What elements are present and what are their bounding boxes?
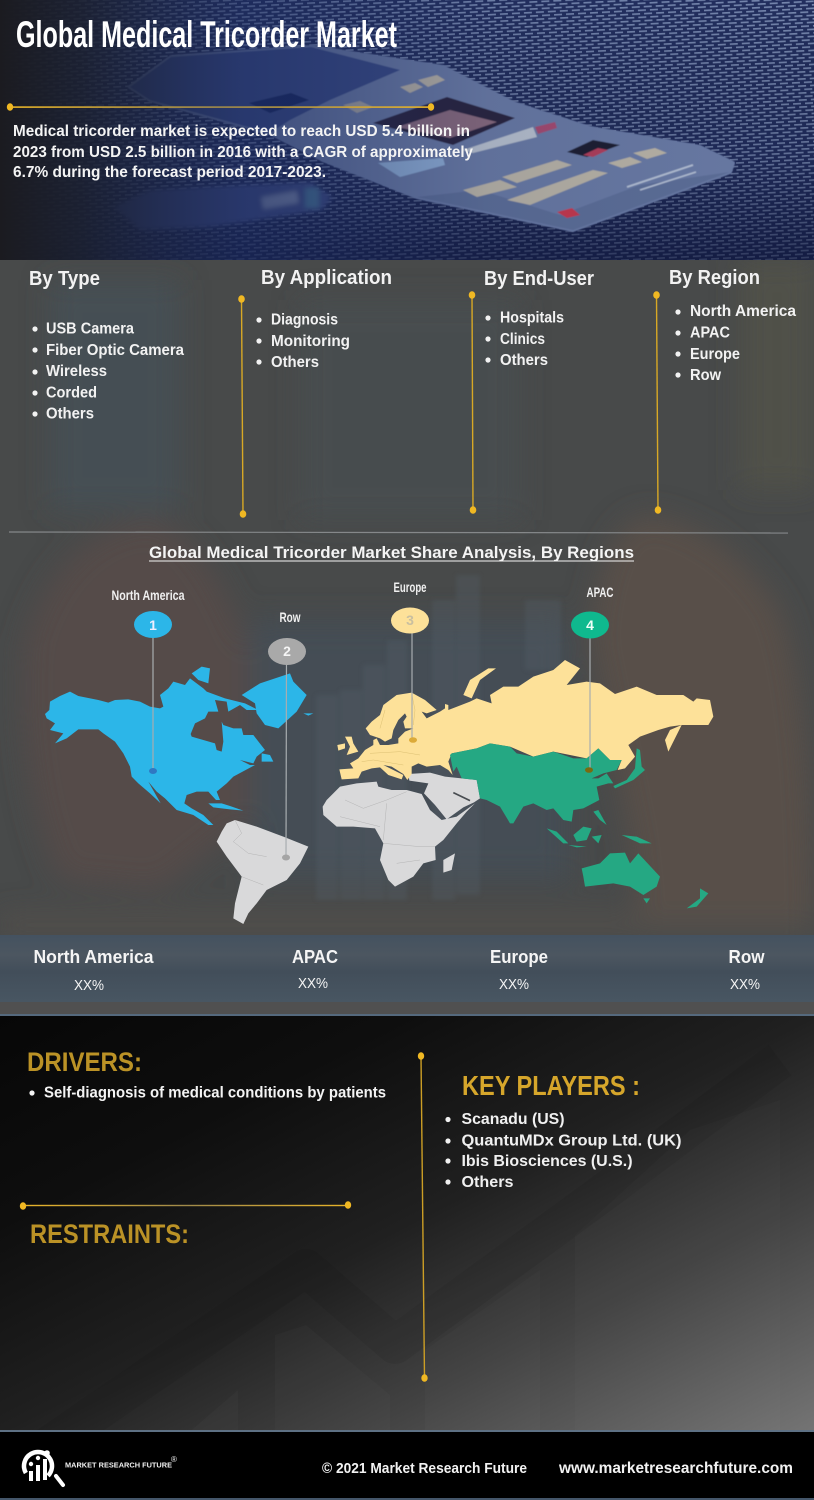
stat: apac xyxy=(292,947,338,992)
illustration: probe pen xyxy=(114,182,332,230)
marker: europe: Europe xyxy=(394,579,427,595)
list: key players: Others xyxy=(462,1174,514,1191)
list: end-user segments: Others xyxy=(500,352,548,369)
text block: market summary xyxy=(13,123,473,181)
list: region segments: Row xyxy=(690,367,722,384)
marker: apac: 4 xyxy=(586,617,594,633)
stat: europe: XX% xyxy=(499,976,529,993)
panel: drivers, restraints and key players xyxy=(0,1016,814,1430)
stat: north america xyxy=(34,947,154,994)
marker: apac: APAC xyxy=(586,584,614,600)
background bars behind the map xyxy=(316,575,561,900)
divider: drivers and restraints xyxy=(20,1201,351,1210)
map region: africa and middle east xyxy=(323,773,480,887)
panel: footer xyxy=(0,1430,814,1500)
list: application segments xyxy=(256,312,350,371)
list: key players: QuantuMDx Group Ltd. (UK) xyxy=(462,1132,682,1150)
list: end-user segments: Clinics xyxy=(500,331,545,348)
panel: segmentation and map background xyxy=(0,260,814,935)
panel: regional share strip xyxy=(0,935,814,1016)
marker: row xyxy=(268,609,306,860)
panel: by end-user xyxy=(469,268,594,514)
text block: market summary: Medical tricorder market is expected to reach USD 5.4 billion in xyxy=(13,123,470,140)
panel: by type xyxy=(29,268,184,422)
stat: apac: APAC xyxy=(292,947,338,967)
divider: end-user xyxy=(469,291,476,514)
title: Global Medical Tricorder Market xyxy=(16,14,397,55)
stat: apac: XX% xyxy=(298,975,328,992)
list: type segments: USB Camera xyxy=(46,320,134,338)
logo: market research future xyxy=(19,1447,177,1485)
heading: key players: KEY PLAYERS : xyxy=(462,1070,640,1101)
illustration: handheld tricorder device xyxy=(130,47,733,230)
list: application segments: Diagnosis xyxy=(271,312,338,328)
list: end-user segments: Hospitals xyxy=(500,310,564,326)
panel: by region xyxy=(653,267,796,514)
stat: row xyxy=(728,947,765,993)
logo: market research future: ® xyxy=(171,1455,177,1464)
heading: by type: By Type xyxy=(29,268,100,290)
list: region segments: North America xyxy=(690,303,796,320)
map region: asia pacific xyxy=(450,743,708,908)
marker: europe: 3 xyxy=(406,612,414,628)
website: www.marketresearchfuture.com xyxy=(558,1460,793,1477)
heading: by application: By Application xyxy=(261,267,392,289)
list: type segments: Others xyxy=(46,406,94,422)
marker: north america xyxy=(112,587,185,774)
list: end-user segments xyxy=(485,310,564,369)
marker: north america: 1 xyxy=(149,617,157,633)
stat: row: XX% xyxy=(730,976,760,993)
list: application segments: Others xyxy=(271,354,319,371)
logo: market research future: MARKET RESEARCH FUTURE xyxy=(65,1462,172,1470)
divider: application xyxy=(238,295,246,518)
list: key players: Scanadu (US) xyxy=(462,1111,564,1128)
list: type segments: Corded xyxy=(46,384,97,402)
list: application segments: Monitoring xyxy=(271,333,350,350)
background arrow and bars xyxy=(22,1459,54,1474)
panel: hero banner xyxy=(0,0,814,260)
copyright: © 2021 Market Research Future xyxy=(322,1460,527,1477)
list: key players: Ibis Biosciences (U.S.) xyxy=(462,1153,632,1170)
divider: vertical xyxy=(418,1052,428,1382)
list: region segments: APAC xyxy=(690,324,730,342)
stat: row: Row xyxy=(728,947,765,967)
map region: north america xyxy=(45,667,313,825)
stat: north america: XX% xyxy=(74,977,104,994)
map region: south america xyxy=(217,820,308,924)
divider: hero gold line xyxy=(7,103,434,111)
list: region segments: Europe xyxy=(690,346,740,363)
list: key players xyxy=(445,1111,682,1191)
marker: europe xyxy=(391,579,429,743)
stat: europe xyxy=(490,947,548,993)
marker: row: 2 xyxy=(283,643,291,659)
chart: world map by region xyxy=(45,579,713,924)
marker: apac xyxy=(571,584,614,773)
marker: north america: North America xyxy=(112,587,185,603)
heading: restraints: RESTRAINTS: xyxy=(30,1219,189,1249)
heading: by end-user: By End-User xyxy=(484,268,594,290)
list: region segments xyxy=(675,303,796,384)
heading: by region: By Region xyxy=(669,267,760,289)
text block: market summary: 2023 from USD 2.5 billion in 2016 with a CAGR of approximately xyxy=(13,144,473,161)
stat: europe: Europe xyxy=(490,947,548,967)
map region: europe and russia xyxy=(337,660,713,780)
heading: drivers: DRIVERS: xyxy=(27,1047,142,1077)
text block: market summary: 6.7% during the forecast period 2017-2023. xyxy=(13,164,326,181)
marker: row: Row xyxy=(280,609,301,625)
heading: market share analysis: Global Medical Tricorder Market Share Analysis, By Regions xyxy=(149,543,634,562)
divider: region xyxy=(653,291,661,514)
list: type segments xyxy=(32,320,184,422)
panel: by application xyxy=(238,267,392,518)
list: type segments: Wireless xyxy=(46,363,107,380)
list: type segments: Fiber Optic Camera xyxy=(46,342,184,359)
stat: north america: North America xyxy=(34,947,154,967)
text block: driver item: Self-diagnosis of medical conditions by patients xyxy=(44,1084,386,1102)
